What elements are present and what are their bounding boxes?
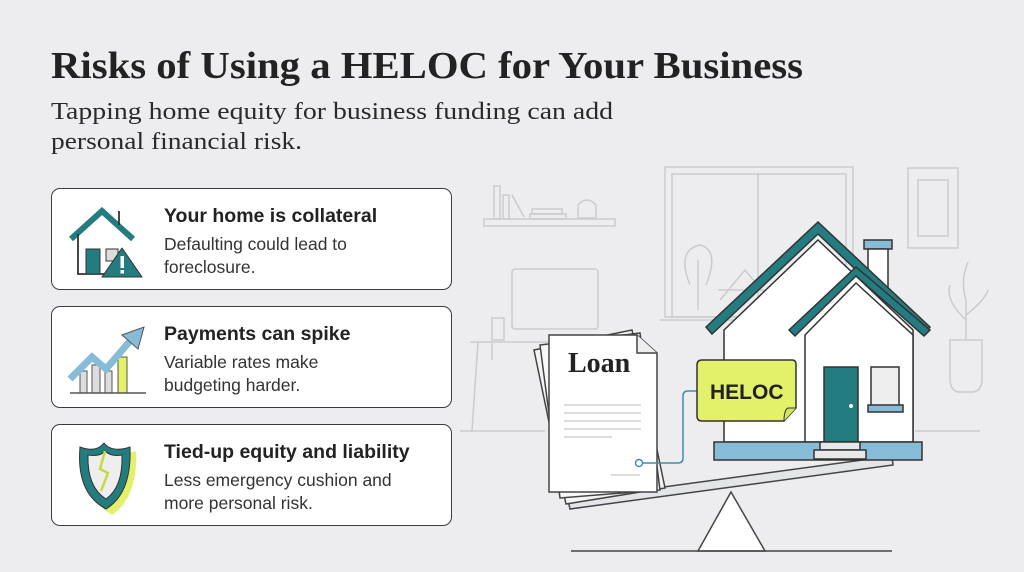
fulcrum <box>571 492 892 551</box>
card: collateral: foreclosure. <box>164 257 255 277</box>
card: equity: Tied-up equity and liability <box>164 441 410 463</box>
icon: house warning <box>69 207 142 278</box>
subtitle: personal financial risk. <box>51 129 302 155</box>
HELOC tag: HELOC <box>710 381 784 404</box>
background room <box>460 167 988 431</box>
icon: rising chart <box>68 326 146 394</box>
card: collateral <box>51 188 452 290</box>
house <box>706 222 930 460</box>
card: collateral: Defaulting could lead to <box>164 234 347 254</box>
HELOC tag <box>697 360 796 421</box>
card: collateral: Your home is collateral <box>164 205 377 227</box>
beam <box>568 456 893 509</box>
card: equity <box>51 424 452 526</box>
card: payments: Variable rates make <box>164 352 318 372</box>
loan documents: Loan <box>568 348 631 379</box>
subtitle: Tapping home equity for business funding can add <box>51 99 613 125</box>
card: equity: Less emergency cushion and <box>164 470 392 490</box>
connector line <box>639 391 697 463</box>
card: payments: Payments can spike <box>164 323 350 345</box>
card: payments <box>51 306 452 408</box>
card: equity: more personal risk. <box>164 493 313 513</box>
loan documents <box>534 330 665 504</box>
title: Risks of Using a HELOC for Your Business <box>51 45 803 87</box>
card: payments: budgeting harder. <box>164 375 300 395</box>
icon: cracked shield <box>79 442 136 515</box>
subtitle <box>51 99 613 155</box>
